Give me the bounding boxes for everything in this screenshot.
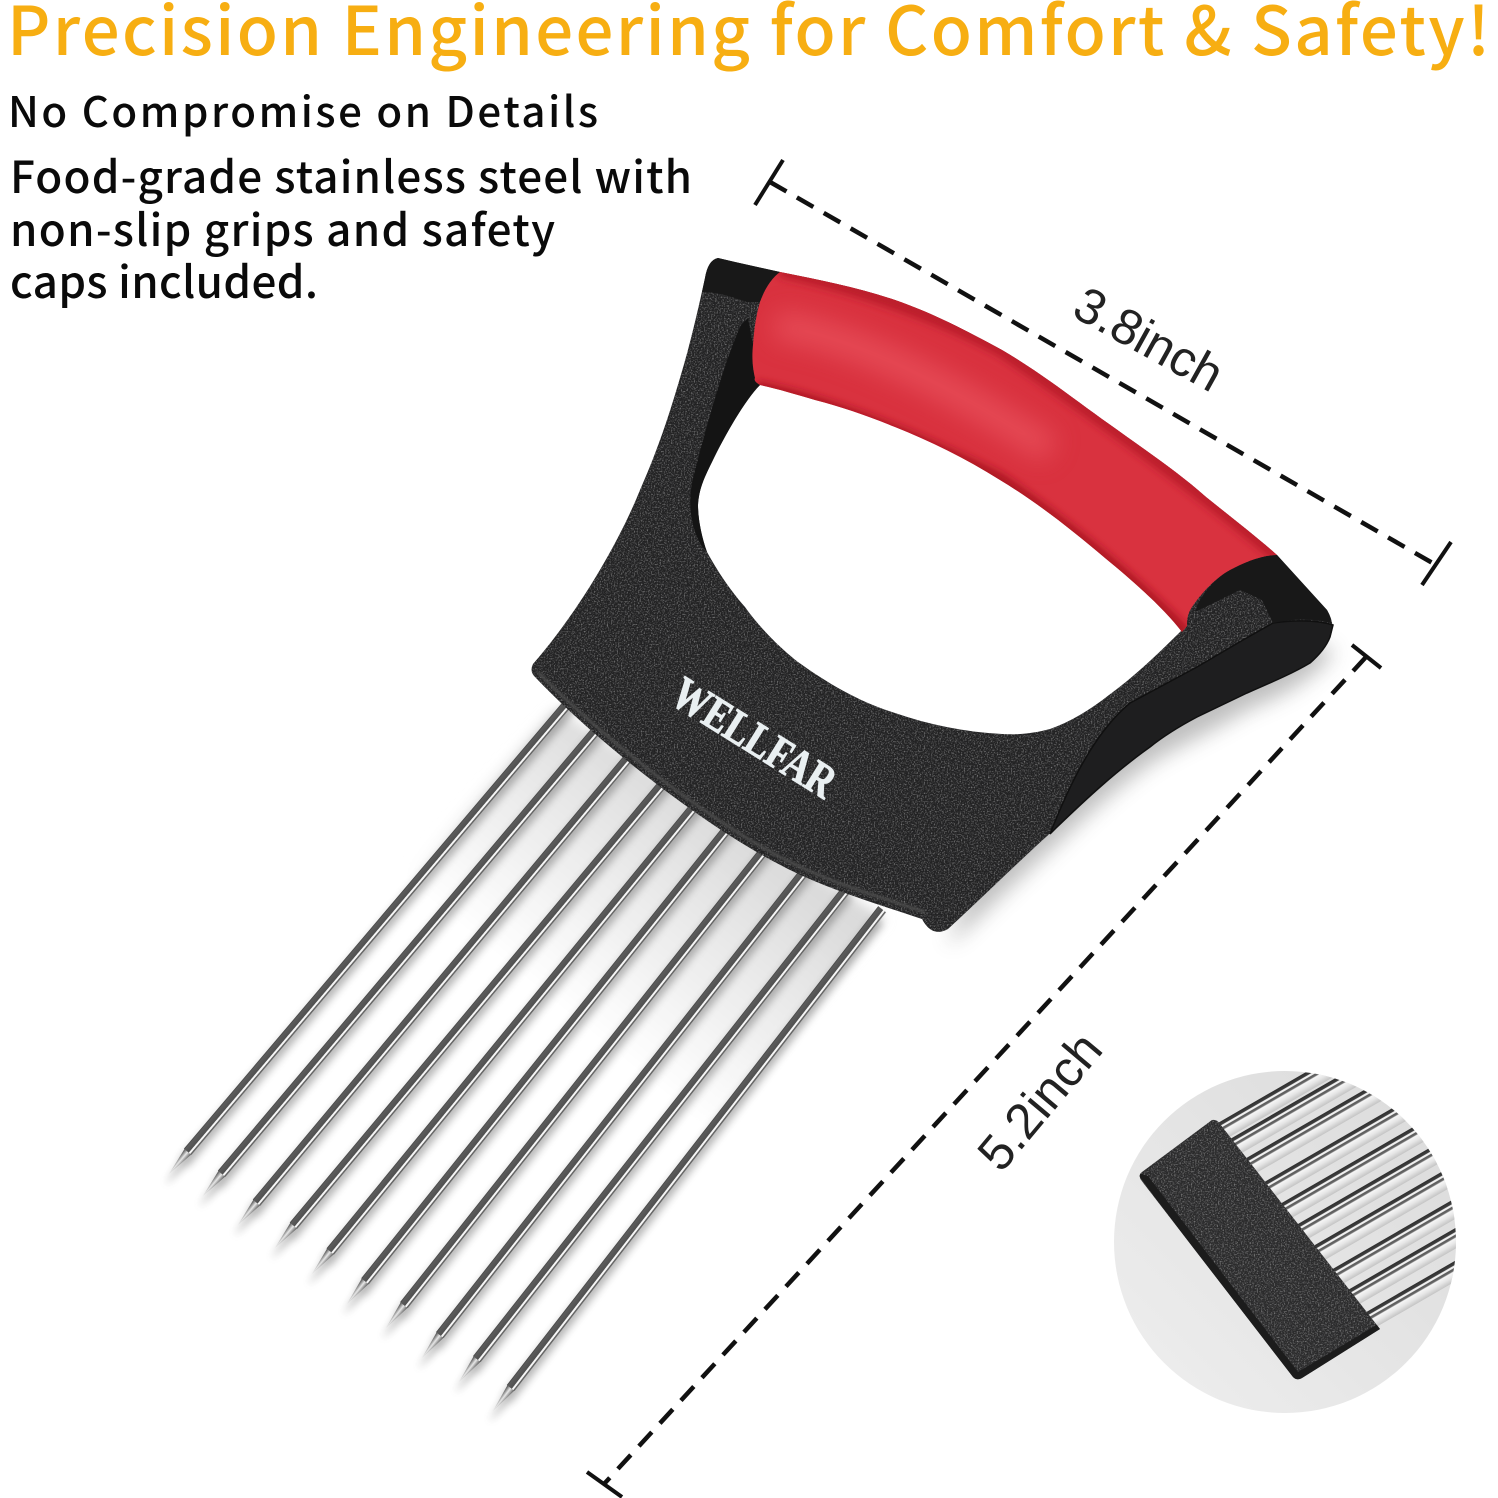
body surface grain — [532, 258, 1332, 932]
subheading: No Compromise on Details — [8, 79, 598, 140]
handle shadow — [948, 640, 1335, 946]
brand name: WELLFAR — [662, 667, 846, 809]
right black cap — [1195, 555, 1331, 623]
dark inner bevel, left — [690, 318, 760, 552]
shadow of pins — [160, 697, 883, 1426]
steel pins — [165, 686, 886, 1414]
red grip — [740, 260, 1290, 640]
description text — [10, 142, 692, 311]
description text: non-slip grips and safety — [10, 195, 555, 259]
inset: safety cap detail — [1114, 1071, 1456, 1413]
soft shadow behind pins near handle — [370, 708, 885, 1140]
side panel, right arm — [1050, 621, 1333, 834]
dimension: length 5.2 inch: 5.2inch — [967, 1022, 1113, 1181]
dimension: width 3.8 inch — [755, 160, 1451, 585]
lower edge bevel — [538, 672, 925, 912]
handle — [532, 258, 1333, 932]
black handle body — [532, 258, 1332, 932]
dimension: length 5.2 inch — [587, 645, 1381, 1497]
inset background circle — [1114, 1071, 1456, 1413]
inset rods — [1218, 1072, 1456, 1326]
dimension: width 3.8 inch: 3.8inch — [1065, 276, 1233, 403]
description text: caps included. — [10, 247, 318, 311]
inset safety cap — [1140, 1120, 1380, 1380]
left black cap — [702, 258, 780, 302]
description text: Food-grade stainless steel with — [10, 142, 692, 206]
